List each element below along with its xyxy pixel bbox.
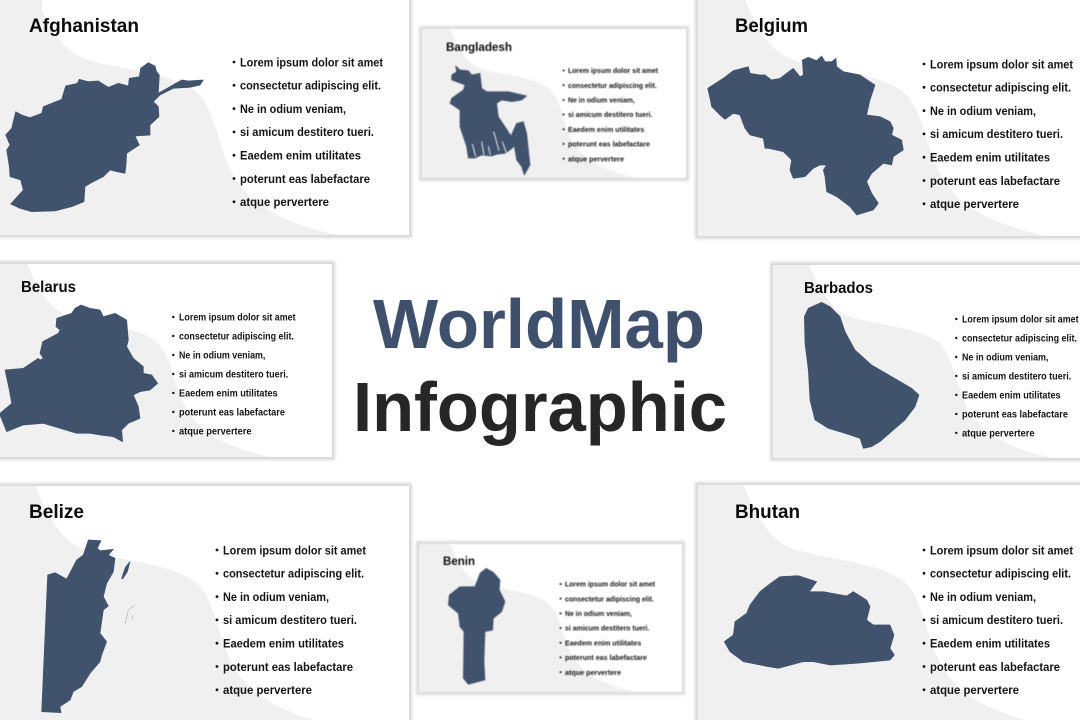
panel: Belgium: atque pervertere [930,197,1019,211]
panel: Belarus: Ne in odium veniam, [179,350,266,361]
panel: Belize: poterunt eas labefactare [223,660,353,674]
panel: Belize: Belize [29,501,84,523]
panel: Barbados: Barbados [804,280,873,297]
panel: Bhutan: Bhutan [735,501,800,523]
panel: Bangladesh: Bangladesh [446,40,512,54]
panel: Belarus: Eaedem enim utilitates [179,388,278,399]
panel: Bangladesh: consectetur adipiscing elit. [568,81,657,90]
panel: Benin: Eaedem enim utilitates [565,638,641,647]
panel: Bhutan: poterunt eas labefactare [930,660,1060,674]
panel: Bangladesh: si amicum destitero tueri. [568,110,652,119]
panel: Afghanistan: Eaedem enim utilitates [240,148,361,162]
panel: Barbados: poterunt eas labefactare [962,409,1068,420]
panel: Benin: Lorem ipsum dolor sit amet [565,580,655,589]
panel: Benin [416,541,685,695]
panel: Afghanistan: consectetur adipiscing elit. [240,79,381,93]
panel: Bhutan [695,482,1080,720]
panel: Bangladesh [419,26,689,181]
panel: Barbados: si amicum destitero tueri. [962,371,1071,382]
panel: Benin: atque pervertere [565,668,621,677]
panel: Belgium: Eaedem enim utilitates [930,150,1050,164]
panel: Afghanistan: atque pervertere [240,195,329,209]
panel: Belgium: Ne in odium veniam, [930,104,1036,118]
title: Infographic [353,368,727,446]
panel: Belize: Eaedem enim utilitates [223,636,344,650]
panel: Belarus: consectetur adipiscing elit. [179,331,294,342]
panel: Belize [0,483,412,720]
panel: Belize: Ne in odium veniam, [223,590,329,604]
panel: Benin: poterunt eas labefactare [565,653,647,662]
panel: Belarus: Lorem ipsum dolor sit amet [179,313,296,324]
panel: Barbados [770,262,1080,461]
panel: Bangladesh: poterunt eas labefactare [568,140,650,149]
panel: Bhutan: Eaedem enim utilitates [930,636,1050,650]
panel: Belarus: poterunt eas labefactare [179,407,285,418]
panel: Barbados: Eaedem enim utilitates [962,390,1061,401]
panel: Barbados: atque pervertere [962,428,1035,439]
panel: Bhutan: si amicum destitero tueri. [930,613,1063,627]
panel: Afghanistan [0,0,412,238]
panel: Afghanistan: si amicum destitero tueri. [240,125,374,139]
panel: Bangladesh: Ne in odium veniam, [568,96,635,105]
panel: Bhutan: atque pervertere [930,683,1019,697]
panel: Belgium: si amicum destitero tueri. [930,127,1063,141]
panel: Bhutan: Ne in odium veniam, [930,590,1036,604]
panel: Belgium: Belgium [735,15,808,37]
panel: Belarus [0,261,335,460]
panel: Bangladesh: Eaedem enim utilitates [568,125,644,134]
panel: Belgium [695,0,1080,239]
panel: Bangladesh: atque pervertere [568,154,624,163]
panel: Belarus: atque pervertere [179,426,252,437]
panel: Benin: consectetur adipiscing elit. [565,594,654,603]
panel: Belgium: poterunt eas labefactare [930,174,1060,188]
panel: Benin: Ne in odium veniam, [565,609,632,618]
panel: Afghanistan: Afghanistan [29,15,139,37]
panel: Belize: atque pervertere [223,683,312,697]
panel: Belize: Lorem ipsum dolor sit amet [223,543,366,557]
panel: Afghanistan: Ne in odium veniam, [240,102,346,116]
panel: Afghanistan: Lorem ipsum dolor sit amet [240,55,383,69]
panel: Belarus: si amicum destitero tueri. [179,369,288,380]
panel: Barbados: Ne in odium veniam, [962,352,1049,363]
panel: Belize: si amicum destitero tueri. [223,613,357,627]
panel: Bangladesh: Lorem ipsum dolor sit amet [568,66,658,75]
panel: Afghanistan: poterunt eas labefactare [240,172,370,186]
title: WorldMap [373,285,705,363]
title [353,285,727,446]
panel: Belize: consectetur adipiscing elit. [223,567,364,581]
panel: Benin: si amicum destitero tueri. [565,624,649,633]
panel: Benin: Benin [443,554,475,568]
panel: Belarus: Belarus [21,279,76,296]
